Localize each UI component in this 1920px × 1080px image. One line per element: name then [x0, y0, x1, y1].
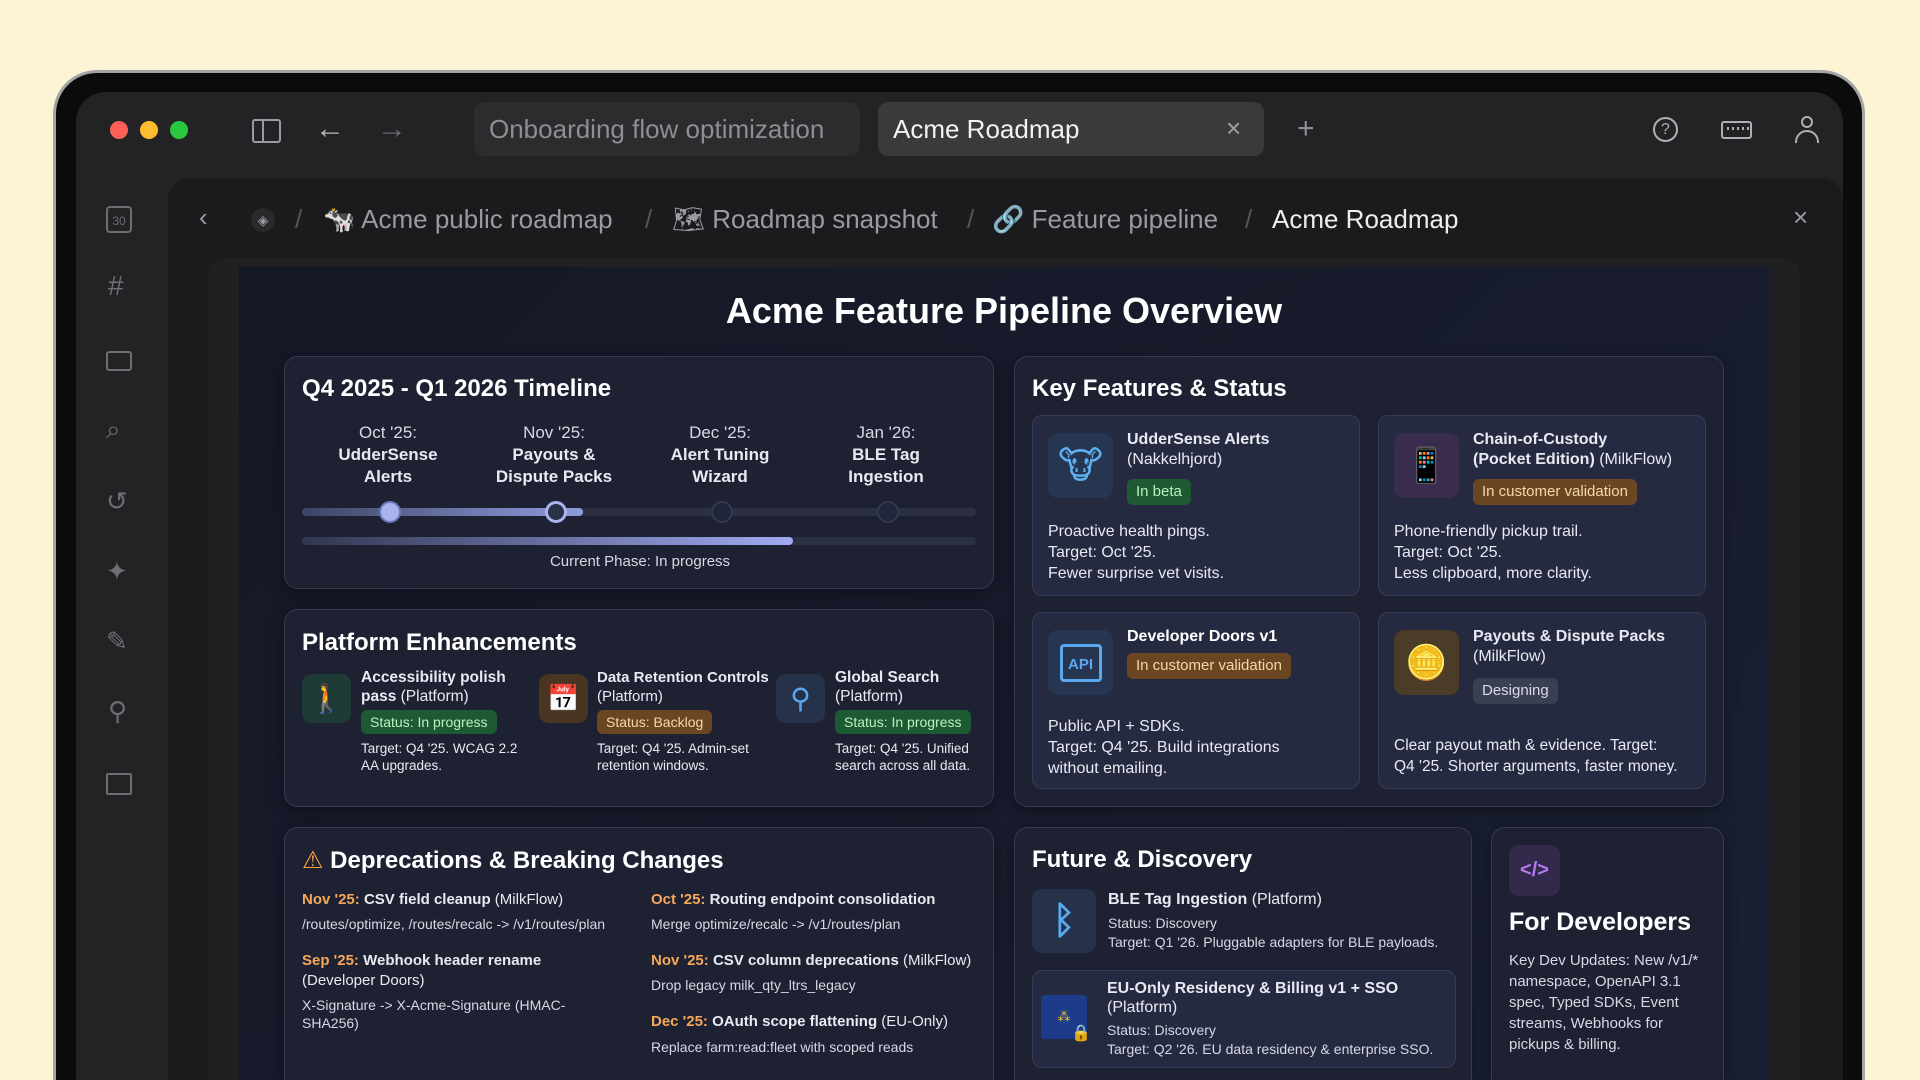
developer notes: spec, Typed SDKs, Event — [1509, 994, 1679, 1011]
card: chain of custody: Chain-of-Custody — [1473, 431, 1607, 448]
item: global search: search across all data. — [835, 758, 970, 773]
item: accessibility: AA upgrades. — [361, 758, 442, 773]
card: payouts: Q4 '25. Shorter arguments, faster money. — [1394, 758, 1678, 775]
milestones labels: Oct '25: — [359, 423, 417, 442]
card: payouts: Designing — [1482, 682, 1549, 699]
item: data retention: Status: Backlog — [606, 714, 703, 730]
deprecation list right: Nov '25: CSV column deprecations (MilkFlow) — [651, 952, 971, 969]
breadcrumb: / — [645, 204, 652, 234]
left sidebar icons: ✎ — [106, 626, 128, 656]
milestones labels: BLE Tag — [852, 445, 920, 464]
tab: onboarding — [474, 102, 860, 156]
item: data retention: (Platform) — [597, 688, 663, 705]
developer notes: streams, Webhooks for — [1509, 1015, 1663, 1032]
card: developer doors — [1032, 612, 1360, 789]
item: data retention — [539, 669, 769, 773]
card: chain of custody: (Pocket Edition) (MilkFlow) — [1473, 451, 1672, 468]
card: UdderSense: Fewer surprise vet visits. — [1048, 565, 1224, 582]
card: UdderSense: Target: Oct '25. — [1048, 544, 1156, 561]
card: developer doors: API — [1068, 656, 1093, 672]
milestones labels: Ingestion — [848, 467, 924, 486]
item: global search: ⚲ — [790, 683, 811, 714]
item: accessibility: Accessibility polish — [361, 669, 506, 686]
item: EU residency card: ⁂ — [1058, 1009, 1070, 1024]
timeline track — [302, 508, 976, 516]
item: global search: (Platform) — [835, 688, 903, 705]
item: accessibility: Target: Q4 '25. WCAG 2.2 — [361, 741, 517, 756]
item: BLE — [1032, 889, 1438, 953]
breadcrumb: 🐄 Acme public roadmap — [323, 204, 613, 234]
item: accessibility: 🚶 — [309, 683, 344, 714]
developer notes: Key Dev Updates: New /v1/* — [1509, 952, 1698, 969]
item: accessibility — [302, 669, 517, 773]
tab: Acme Roadmap active: × — [1226, 113, 1241, 143]
deprecation list left: (Developer Doors) — [302, 972, 425, 989]
left sidebar icons: ↺ — [106, 486, 128, 516]
current phase text: Current Phase: In progress — [550, 553, 730, 570]
breadcrumb — [199, 202, 1808, 234]
panel: for developers — [1491, 827, 1724, 1080]
card: developer doors: Developer Doors v1 — [1127, 628, 1277, 645]
item: data retention: 📅 — [547, 683, 580, 713]
deprecation list right — [651, 891, 971, 1055]
milestones labels — [338, 423, 924, 486]
card: payouts — [1378, 612, 1706, 789]
infographic frame — [208, 258, 1800, 1080]
breadcrumb: ‹ — [199, 202, 208, 232]
milestones labels: Jan '26: — [856, 423, 916, 442]
card: developer doors: Target: Q4 '25. Build integrations — [1048, 739, 1280, 756]
deprecation list left: SHA256) — [302, 1015, 359, 1031]
breadcrumb: / — [295, 204, 302, 234]
breadcrumb: × — [1793, 202, 1808, 232]
item: BLE: ᛒ — [1053, 900, 1075, 942]
left sidebar icons: # — [108, 270, 124, 301]
milestones labels: Dec '25: — [689, 423, 751, 442]
card: developer doors: In customer validation — [1136, 657, 1282, 674]
milestones labels: Alerts — [364, 467, 412, 486]
panel: deprecations — [284, 827, 994, 1080]
deprecation list right: Drop legacy milk_qty_ltrs_legacy — [651, 977, 856, 993]
icon: help — [1653, 117, 1678, 142]
breadcrumb: Acme Roadmap — [1272, 204, 1458, 234]
item: EU residency card: Target: Q2 '26. EU data residency & enterprise SSO. — [1107, 1041, 1433, 1057]
heading: deprecations: ⚠ Deprecations & Breaking Changes — [302, 847, 724, 874]
panel: future & discovery — [1014, 827, 1472, 1080]
item: BLE: BLE Tag Ingestion (Platform) — [1108, 891, 1322, 908]
milestones labels: UdderSense — [338, 445, 438, 464]
deprecation list left: Sep '25: Webhook header rename — [302, 952, 541, 969]
milestones labels: Payouts & — [512, 445, 596, 464]
item: BLE: Target: Q1 '26. Pluggable adapters for BLE payloads. — [1108, 934, 1438, 950]
breadcrumb: 🔗 Feature pipeline — [992, 204, 1218, 234]
card: payouts: 🪙 — [1405, 644, 1448, 682]
milestones labels: Alert Tuning — [671, 445, 769, 464]
title: Acme Feature Pipeline Overview — [726, 290, 1282, 331]
card: UdderSense: (Nakkelhjord) — [1127, 451, 1222, 468]
item: data retention: retention windows. — [597, 758, 709, 773]
item: EU residency card: Status: Discovery — [1107, 1022, 1216, 1038]
icon: forward arrow: → — [377, 112, 407, 145]
card: UdderSense — [1032, 415, 1360, 596]
item: accessibility: Status: In progress — [370, 714, 488, 730]
card: UdderSense: UdderSense Alerts — [1127, 431, 1270, 448]
deprecation list left: /routes/optimize, /routes/recalc -> /v1/routes/plan — [302, 916, 605, 932]
heading: future: Future & Discovery — [1032, 846, 1252, 873]
card: chain of custody: 📱 — [1405, 446, 1448, 484]
card: UdderSense: 🐮 — [1058, 445, 1103, 487]
deprecation list right: Replace farm:read:fleet with scoped reads — [651, 1039, 913, 1055]
content panel — [168, 178, 1843, 1080]
card: chain of custody — [1378, 415, 1706, 596]
breadcrumb: ◈ — [258, 212, 268, 228]
tab: Acme Roadmap active: Acme Roadmap — [893, 114, 1079, 144]
tab: Acme Roadmap active — [878, 102, 1264, 156]
icon: back arrow: ← — [315, 112, 345, 145]
card: payouts: (MilkFlow) — [1473, 648, 1546, 665]
item: data retention: Data Retention Controls — [597, 669, 769, 686]
milestones labels: Dispute Packs — [496, 467, 612, 486]
breadcrumb: / — [1245, 204, 1252, 234]
item: global search — [776, 669, 971, 773]
left sidebar icons: ⌕ — [106, 414, 121, 444]
card: chain of custody: Phone-friendly pickup trail. — [1394, 523, 1583, 540]
panel: timeline — [284, 356, 994, 589]
deprecation list right: Dec '25: OAuth scope flattening (EU-Only) — [651, 1013, 948, 1030]
item: global search: Target: Q4 '25. Unified — [835, 741, 969, 756]
infographic canvas — [239, 267, 1769, 1080]
traffic lights — [110, 121, 188, 139]
left sidebar icons: 30 — [112, 214, 126, 228]
item: global search: Global Search — [835, 669, 939, 686]
heading: timeline: Q4 2025 - Q1 2026 Timeline — [302, 375, 611, 402]
tab: onboarding: Onboarding flow optimization — [489, 114, 824, 144]
card: chain of custody: In customer validation — [1482, 483, 1628, 500]
item: accessibility: pass (Platform) — [361, 688, 469, 705]
icon: code: </> — [1520, 859, 1549, 881]
breadcrumb: / — [967, 204, 974, 234]
icon: keyboard — [1721, 121, 1752, 139]
item: global search: Status: In progress — [844, 714, 962, 730]
deprecation list left: X-Signature -> X-Acme-Signature (HMAC- — [302, 997, 565, 1013]
panel: platform enhancements — [284, 609, 994, 807]
heading: for developers: For Developers — [1509, 908, 1691, 936]
card: UdderSense: In beta — [1136, 483, 1182, 500]
card: payouts: Clear payout math & evidence. Target: — [1394, 737, 1657, 754]
item: data retention: Target: Q4 '25. Admin-set — [597, 741, 749, 756]
heading: platform: Platform Enhancements — [302, 629, 577, 656]
item: BLE: Status: Discovery — [1108, 915, 1217, 931]
card: chain of custody: Less clipboard, more clarity. — [1394, 565, 1592, 582]
deprecation list right: Oct '25: Routing endpoint consolidation — [651, 891, 935, 908]
milestones labels: Nov '25: — [523, 423, 585, 442]
milestones labels: Wizard — [692, 467, 748, 486]
card: payouts: Payouts & Dispute Packs — [1473, 628, 1665, 645]
item: EU residency card: EU-Only Residency & Billing v1 + SSO — [1107, 980, 1398, 997]
icon: sidebar toggle — [252, 119, 281, 143]
item: EU residency card — [1032, 970, 1456, 1068]
icon: new tab plus: + — [1297, 112, 1315, 145]
icon: user — [1795, 116, 1819, 143]
left sidebar icons: ✦ — [106, 556, 128, 586]
deprecation list right: Merge optimize/recalc -> /v1/routes/plan — [651, 916, 900, 932]
card: chain of custody: Target: Oct '25. — [1394, 544, 1502, 561]
left sidebar icons: ⚲ — [108, 696, 127, 726]
progress bar — [302, 537, 976, 545]
developer notes: namespace, OpenAPI 3.1 — [1509, 973, 1681, 990]
breadcrumb: 🗺 Roadmap snapshot — [672, 204, 938, 234]
left sidebar icons — [106, 206, 132, 795]
icon: help: ? — [1661, 121, 1670, 138]
item: EU residency card: (Platform) — [1107, 999, 1177, 1016]
card: developer doors: without emailing. — [1048, 760, 1167, 777]
icon: code — [1509, 845, 1560, 896]
item: EU residency card: 🔒 — [1071, 1025, 1091, 1042]
card: UdderSense: Proactive health pings. — [1048, 523, 1210, 540]
card: developer doors: Public API + SDKs. — [1048, 718, 1185, 735]
heading: key features: Key Features & Status — [1032, 375, 1287, 402]
deprecation list left: Nov '25: CSV field cleanup (MilkFlow) — [302, 891, 563, 908]
developer notes: pickups & billing. — [1509, 1036, 1621, 1053]
developer notes — [1509, 952, 1698, 1053]
deprecation list left — [302, 891, 605, 1031]
panel: key features — [1014, 356, 1724, 807]
